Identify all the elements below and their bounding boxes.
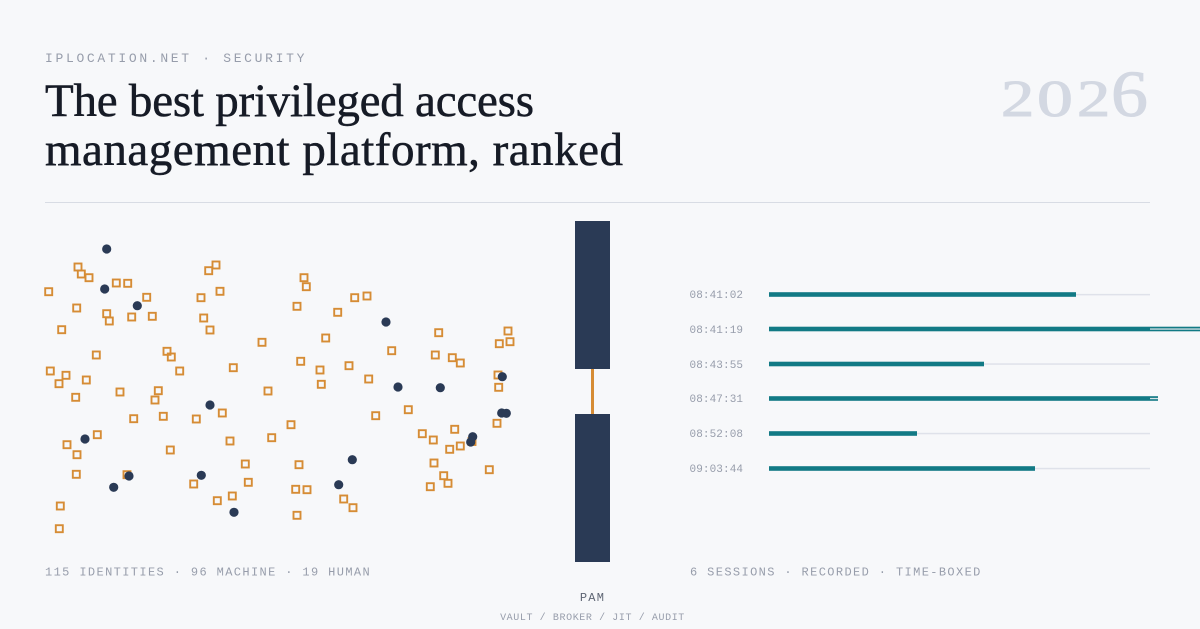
human identities [80, 244, 511, 517]
title: management platform, ranked [45, 124, 623, 176]
gateway sublabel: VAULT / BROKER / JIT / AUDIT [500, 612, 685, 624]
title: The best privileged access [45, 75, 534, 127]
title [45, 75, 623, 176]
session 08:41:02: 08:41:02 [690, 290, 743, 302]
session 08:52:08: 08:52:08 [690, 429, 743, 441]
PAM gateway [575, 221, 610, 562]
session 08:41:02 [690, 290, 1150, 302]
machine identities [45, 262, 513, 532]
year: 6 [1111, 59, 1148, 131]
identity scatter plot [45, 244, 513, 532]
session 08:52:08 [690, 429, 1150, 441]
year: 2 [1001, 70, 1034, 127]
session timeline [690, 290, 1200, 476]
year: 2 [1077, 70, 1110, 127]
session 08:47:31 [690, 394, 1158, 406]
identities caption: 115 IDENTITIES · 96 MACHINE · 19 HUMAN [45, 566, 371, 580]
year: 0 [1037, 70, 1073, 128]
session 08:43:55: 08:43:55 [690, 360, 743, 372]
session 08:41:19 [690, 325, 1200, 337]
year [1001, 59, 1148, 131]
session 09:03:44: 09:03:44 [690, 464, 743, 476]
session 09:03:44 [690, 464, 1150, 476]
session 08:43:55 [690, 360, 1150, 372]
session 08:47:31: 08:47:31 [690, 394, 743, 406]
eyebrow: IPLOCATION.NET · SECURITY [45, 51, 307, 66]
gateway label: PAM [580, 591, 605, 605]
sessions caption: 6 SESSIONS · RECORDED · TIME-BOXED [690, 566, 982, 580]
session 08:41:19: 08:41:19 [690, 325, 743, 337]
